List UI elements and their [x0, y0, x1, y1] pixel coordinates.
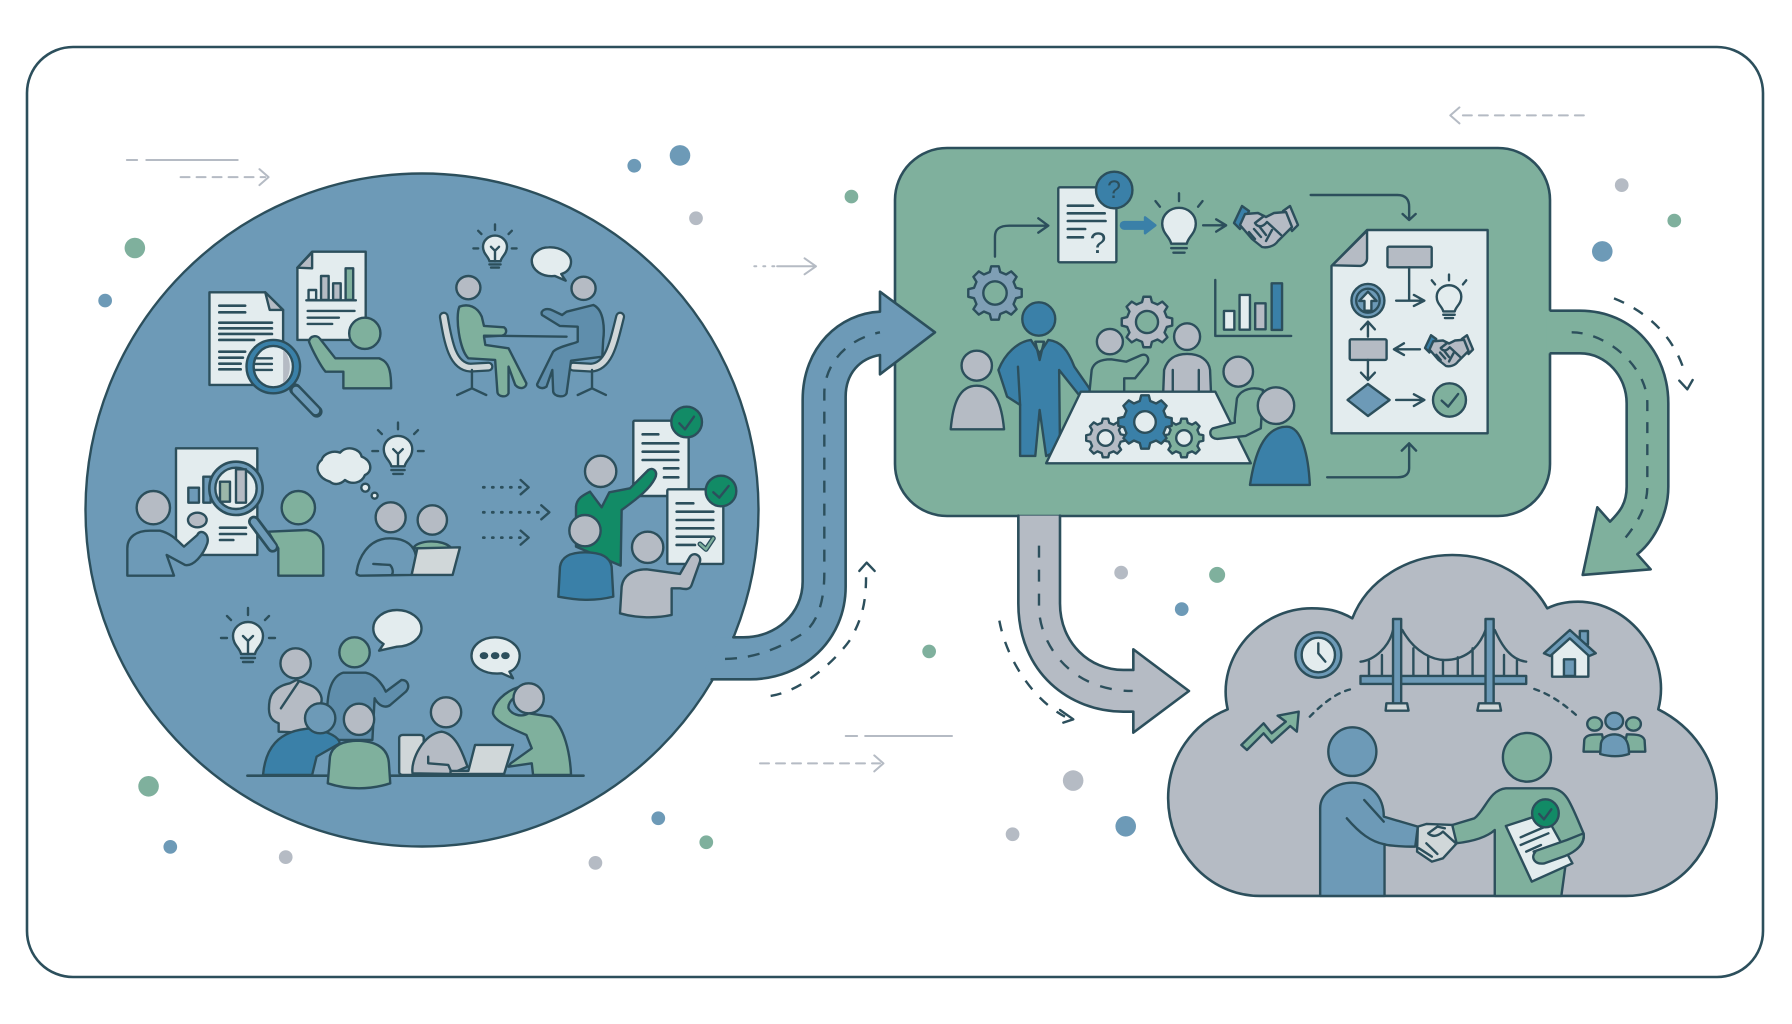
icon: chart report with person	[297, 252, 391, 388]
icon: clock	[1295, 632, 1341, 678]
arrow into flow chart top	[1311, 195, 1416, 220]
blue seated person	[263, 703, 340, 775]
icon: suspension bridge	[1360, 619, 1526, 711]
icon: report with magnifier	[209, 292, 317, 412]
front person	[1250, 387, 1310, 485]
speech bubble with dots	[471, 637, 520, 678]
grey person left	[951, 351, 1004, 429]
arrow: planning panel to outcome right	[1547, 298, 1693, 575]
icon: house	[1544, 630, 1596, 677]
speech bubble plain	[373, 610, 421, 651]
grey person behind table	[1163, 323, 1211, 392]
icon: handshake	[1234, 206, 1298, 247]
thought cloud	[318, 448, 378, 499]
grey person with laptop	[399, 697, 513, 775]
question mark on document: ?	[1090, 227, 1106, 260]
icon: group of people	[1584, 713, 1645, 756]
icons: documents and seated conversation	[209, 247, 620, 412]
decorative dashed arrows	[127, 107, 1591, 771]
clasped hands	[1417, 824, 1457, 862]
icon: gear centre	[1122, 297, 1172, 347]
arrow: circle to planning panel	[700, 292, 935, 696]
icon: lightbulb middle	[372, 423, 424, 474]
decorative dots	[98, 145, 1681, 870]
circle background	[86, 174, 758, 846]
icon: seated conversation	[444, 247, 620, 396]
document two with badge	[667, 476, 736, 564]
icon: team meeting	[247, 610, 584, 788]
icon: lightbulb flow chart	[1432, 275, 1466, 318]
icon: handshake flow chart	[1425, 335, 1473, 366]
flow arrow into document	[995, 218, 1048, 257]
question document	[1058, 172, 1132, 262]
flow chart document	[1332, 230, 1488, 433]
icon: lightbulb bottom	[221, 608, 275, 662]
standing person blue with arm	[327, 637, 408, 740]
panel: outcome cloud	[1168, 555, 1717, 896]
person left shaking hands	[1320, 727, 1418, 896]
cloud background	[1168, 555, 1717, 896]
pair with laptop	[356, 502, 460, 576]
seated person blue	[558, 515, 613, 600]
icon: approval group with dotted arrows	[483, 407, 736, 617]
thick blue arrow	[1124, 217, 1155, 233]
panel: planning rounded rectangle	[895, 148, 1550, 516]
presenter in green	[576, 456, 656, 566]
question mark badge: ?	[1107, 176, 1121, 204]
dotted arrows	[483, 480, 549, 545]
person right shaking hands with document	[1452, 733, 1584, 896]
green background	[895, 148, 1550, 516]
icon: table gear grey	[1086, 419, 1125, 457]
person reaching across table	[1210, 357, 1263, 439]
chart document with magnifier	[176, 448, 273, 555]
meeting table	[1046, 392, 1251, 463]
icon: growth arrow	[1241, 712, 1299, 750]
grey person pointing	[620, 532, 700, 617]
person raising hand	[1090, 329, 1148, 392]
table line	[247, 774, 584, 777]
icon: table gear blue	[1118, 395, 1172, 449]
icon: lightbulb	[1155, 193, 1203, 253]
green seated person	[328, 704, 390, 788]
dotted connectors	[1310, 689, 1578, 717]
arrow into flow chart bottom	[1327, 443, 1416, 477]
arrow: planning panel to outcome left	[999, 516, 1189, 733]
grey person thinking	[269, 648, 322, 733]
icon: gear left	[968, 266, 1022, 320]
arrow to handshake	[1203, 219, 1226, 232]
green person at laptop	[493, 683, 571, 775]
document one with badge	[633, 407, 702, 496]
panel: research and discussion circle	[86, 174, 758, 846]
presenter in blue suit	[998, 302, 1092, 456]
person left	[127, 491, 208, 576]
icon: lightbulb top	[473, 224, 517, 268]
icon: people reviewing chart and thinking pair	[127, 448, 460, 576]
icon: table gear green	[1165, 419, 1203, 457]
person right	[254, 491, 323, 576]
bar chart	[1215, 280, 1291, 336]
